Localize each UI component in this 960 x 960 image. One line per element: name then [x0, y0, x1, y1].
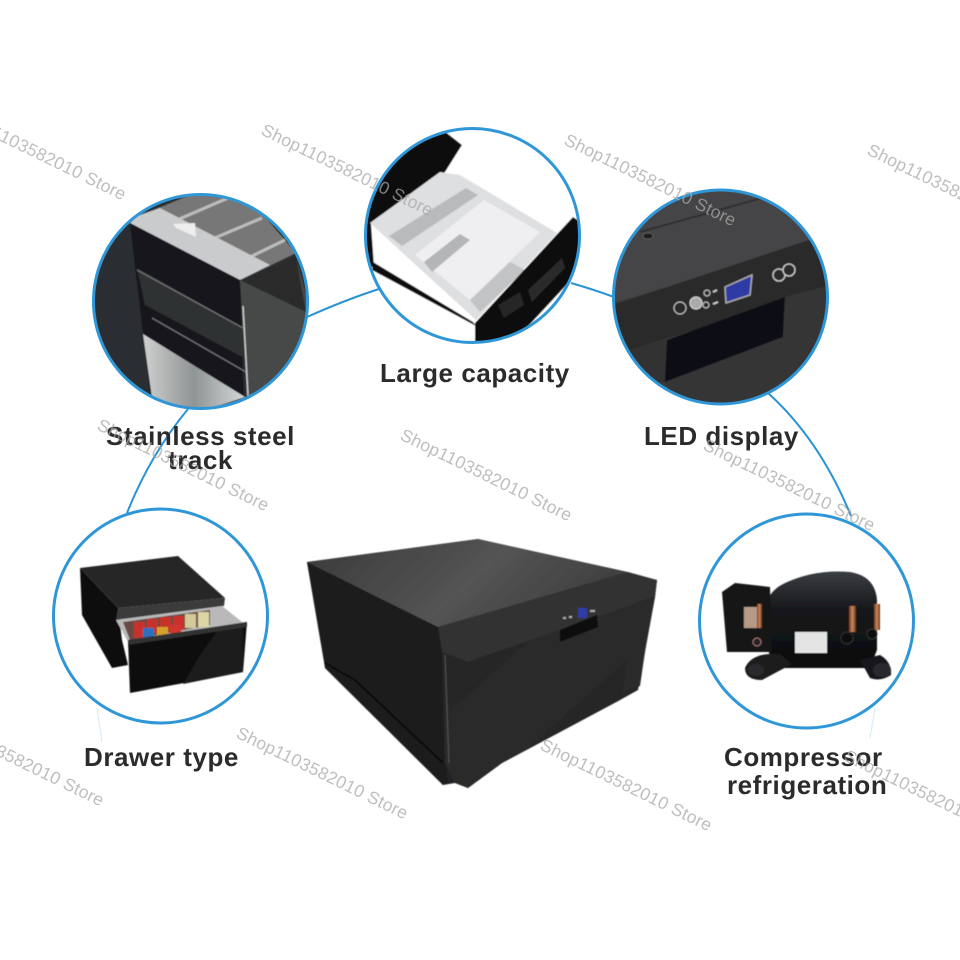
detail photo: open drawer fridge	[54, 509, 268, 723]
fridge silhouette	[307, 539, 657, 788]
fridge left side	[307, 562, 448, 785]
fridge top	[307, 539, 628, 627]
label: Large capacity: Large capacity	[380, 358, 570, 388]
detail photo: compressor	[700, 514, 914, 728]
store watermarks: Shop1103582010 Store	[94, 415, 273, 515]
fridge handle recess	[560, 615, 598, 642]
detail photo: LED display panel	[610, 186, 832, 410]
main product: black drawer fridge	[307, 539, 657, 788]
detail photo: stainless steel track	[90, 190, 315, 420]
connector lines between feature circles	[97, 283, 875, 742]
label: Stainless steel track: Stainless steel	[106, 421, 295, 451]
store watermarks: Shop1103582010 Store	[537, 735, 716, 835]
store watermarks: Shop1103582010 Store	[233, 723, 412, 823]
fridge right side panel	[622, 597, 653, 693]
store watermarks: Shop1103582010 Store	[561, 130, 740, 230]
label: Compressor refrigeration: refrigeration	[727, 770, 887, 800]
store watermarks: Shop1103582010 Store	[700, 435, 879, 535]
label: Compressor refrigeration	[724, 742, 887, 800]
store watermarks: Shop1103582010 Store	[258, 120, 437, 220]
label: LED display: LED display	[644, 421, 799, 451]
fridge drawer front	[442, 597, 655, 788]
fridge display	[578, 608, 587, 618]
label: Compressor refrigeration: Compressor	[724, 742, 883, 772]
fridge top front band	[438, 572, 657, 662]
store watermarks	[0, 104, 960, 846]
store watermarks: Shop1103582010 Store	[397, 425, 576, 525]
label: Stainless steel track	[106, 421, 295, 475]
label: Stainless steel track: track	[168, 445, 233, 475]
detail photo: large capacity tray	[365, 128, 585, 345]
label: Drawer type: Drawer type	[84, 742, 239, 772]
